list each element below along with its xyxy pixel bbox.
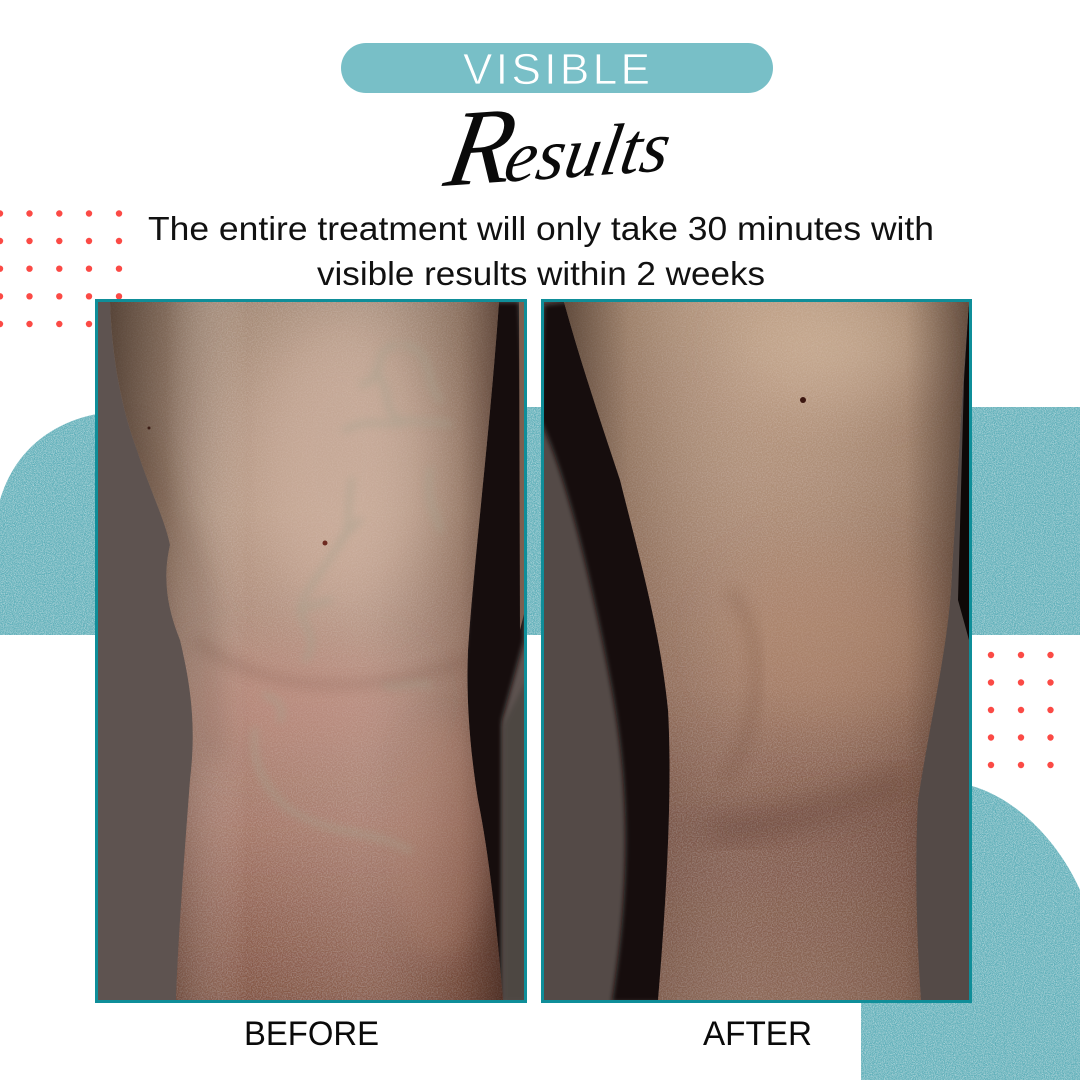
- background teal band: centre and right: [520, 407, 1080, 635]
- heading pill: VISIBLE: VISIBLE: [463, 45, 650, 94]
- subtitle text: The entire treatment will only take 30 minutes with: [148, 210, 934, 247]
- heading pill: VISIBLE: [341, 43, 773, 94]
- script heading: Results: Results: [437, 72, 683, 210]
- background teal shape: left: [0, 414, 97, 635]
- background teal shape: lower right: [861, 786, 1080, 1080]
- photo panel: after: [540, 299, 972, 1003]
- label: BEFORE: BEFORE: [244, 1015, 379, 1053]
- dot grid: upper left: [0, 210, 122, 327]
- photo panel: before: [95, 299, 527, 1003]
- dark shadow behind after leg: [544, 302, 670, 1000]
- knee crease shadow: [202, 644, 442, 688]
- label: AFTER: AFTER: [703, 1015, 812, 1053]
- dot grid: right: [988, 652, 1054, 768]
- dark shadow behind before leg: [462, 302, 524, 1000]
- varicose veins: [266, 358, 408, 850]
- knee crease shadows: [710, 780, 910, 830]
- subtitle text: visible results within 2 weeks: [317, 255, 765, 292]
- subtitle text: [148, 210, 934, 292]
